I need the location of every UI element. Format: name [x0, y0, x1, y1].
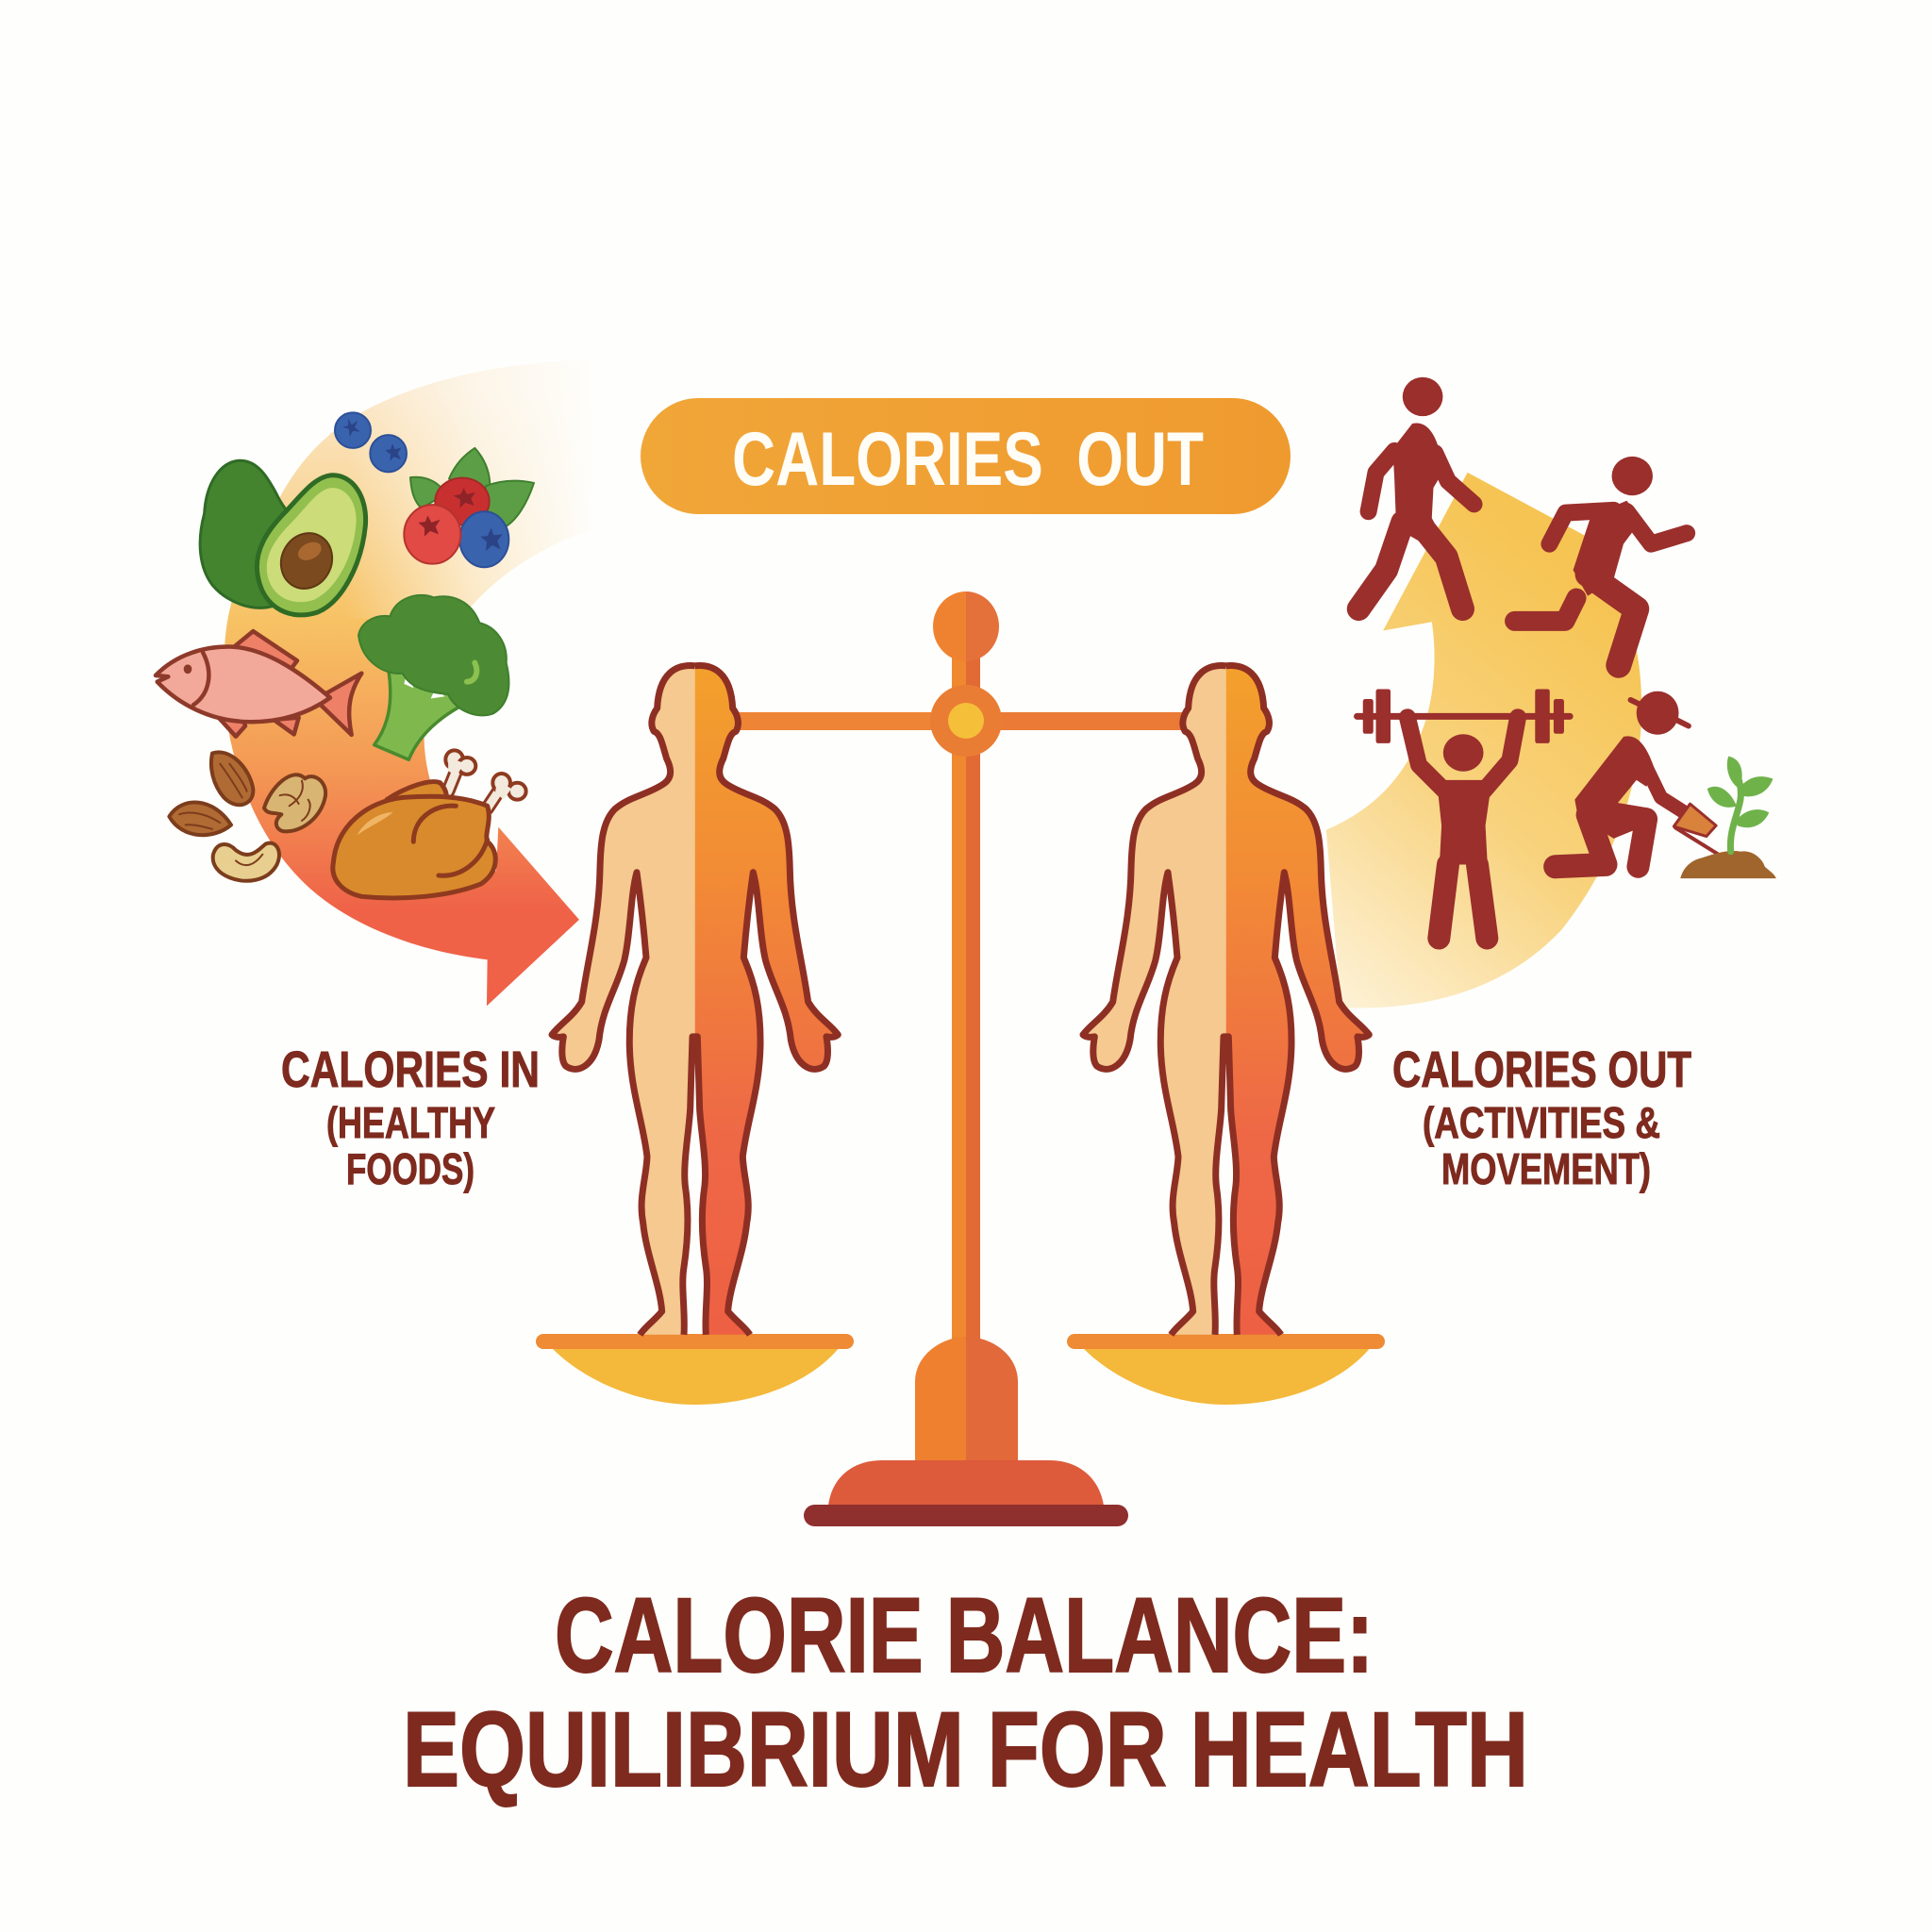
- food icons group: [156, 412, 534, 898]
- icon: weightlifter with barbell: [1357, 689, 1570, 939]
- text block: calories in: (HEALTHY: [326, 1098, 495, 1147]
- icon: broccoli: [358, 595, 508, 759]
- scale beam: [731, 712, 967, 730]
- icon: blueberries: [335, 412, 407, 472]
- balance scale: [536, 591, 1385, 1526]
- title: EQUILIBRIUM FOR HEALTH: [403, 1690, 1528, 1808]
- text block: calories out: (ACTIVITIES &: [1423, 1098, 1660, 1147]
- right pan: [1067, 1334, 1385, 1405]
- icon: avocado: [200, 460, 366, 615]
- body figure: right: [1079, 662, 1373, 1337]
- icon: walking person: [1358, 377, 1474, 609]
- icon: nuts: [169, 752, 325, 881]
- title: [403, 1576, 1528, 1808]
- icon: running person: [1515, 457, 1687, 665]
- left pan: [536, 1334, 854, 1405]
- icon: sprout in soil: [1680, 757, 1776, 878]
- chicken bones: [448, 764, 500, 808]
- stand bar: [804, 1505, 1128, 1526]
- text block: calories out: MOVEMENT): [1441, 1144, 1651, 1193]
- text block: calories in: FOODS): [346, 1144, 475, 1193]
- central pivot: [930, 685, 1002, 757]
- stand foot: [828, 1460, 1104, 1506]
- activity figures group: [1357, 377, 1776, 939]
- icon: mixed berries with leaves: [404, 448, 534, 567]
- text block: calories in: [281, 1041, 540, 1193]
- text block: calories out: [1392, 1041, 1691, 1193]
- icon: fish: [156, 631, 361, 737]
- stand base dome: [915, 1337, 1018, 1460]
- arrow: calories in curved arrow: [224, 349, 623, 1006]
- icon: roast chicken: [333, 750, 526, 898]
- title: CALORIE BALANCE:: [555, 1576, 1374, 1694]
- label pill: calories out: [641, 398, 1291, 514]
- body figure: left: [549, 662, 841, 1337]
- icon: gardener kneeling with spade: [1556, 691, 1720, 867]
- label pill: calories out: CALORIES OUT: [732, 417, 1204, 502]
- scale post: [952, 641, 980, 1344]
- text block: calories out: CALORIES OUT: [1392, 1041, 1691, 1098]
- text block: calories in: CALORIES IN: [281, 1041, 540, 1098]
- top ball: [933, 591, 999, 661]
- arrow: calories out curved arrow: [1326, 473, 1641, 1008]
